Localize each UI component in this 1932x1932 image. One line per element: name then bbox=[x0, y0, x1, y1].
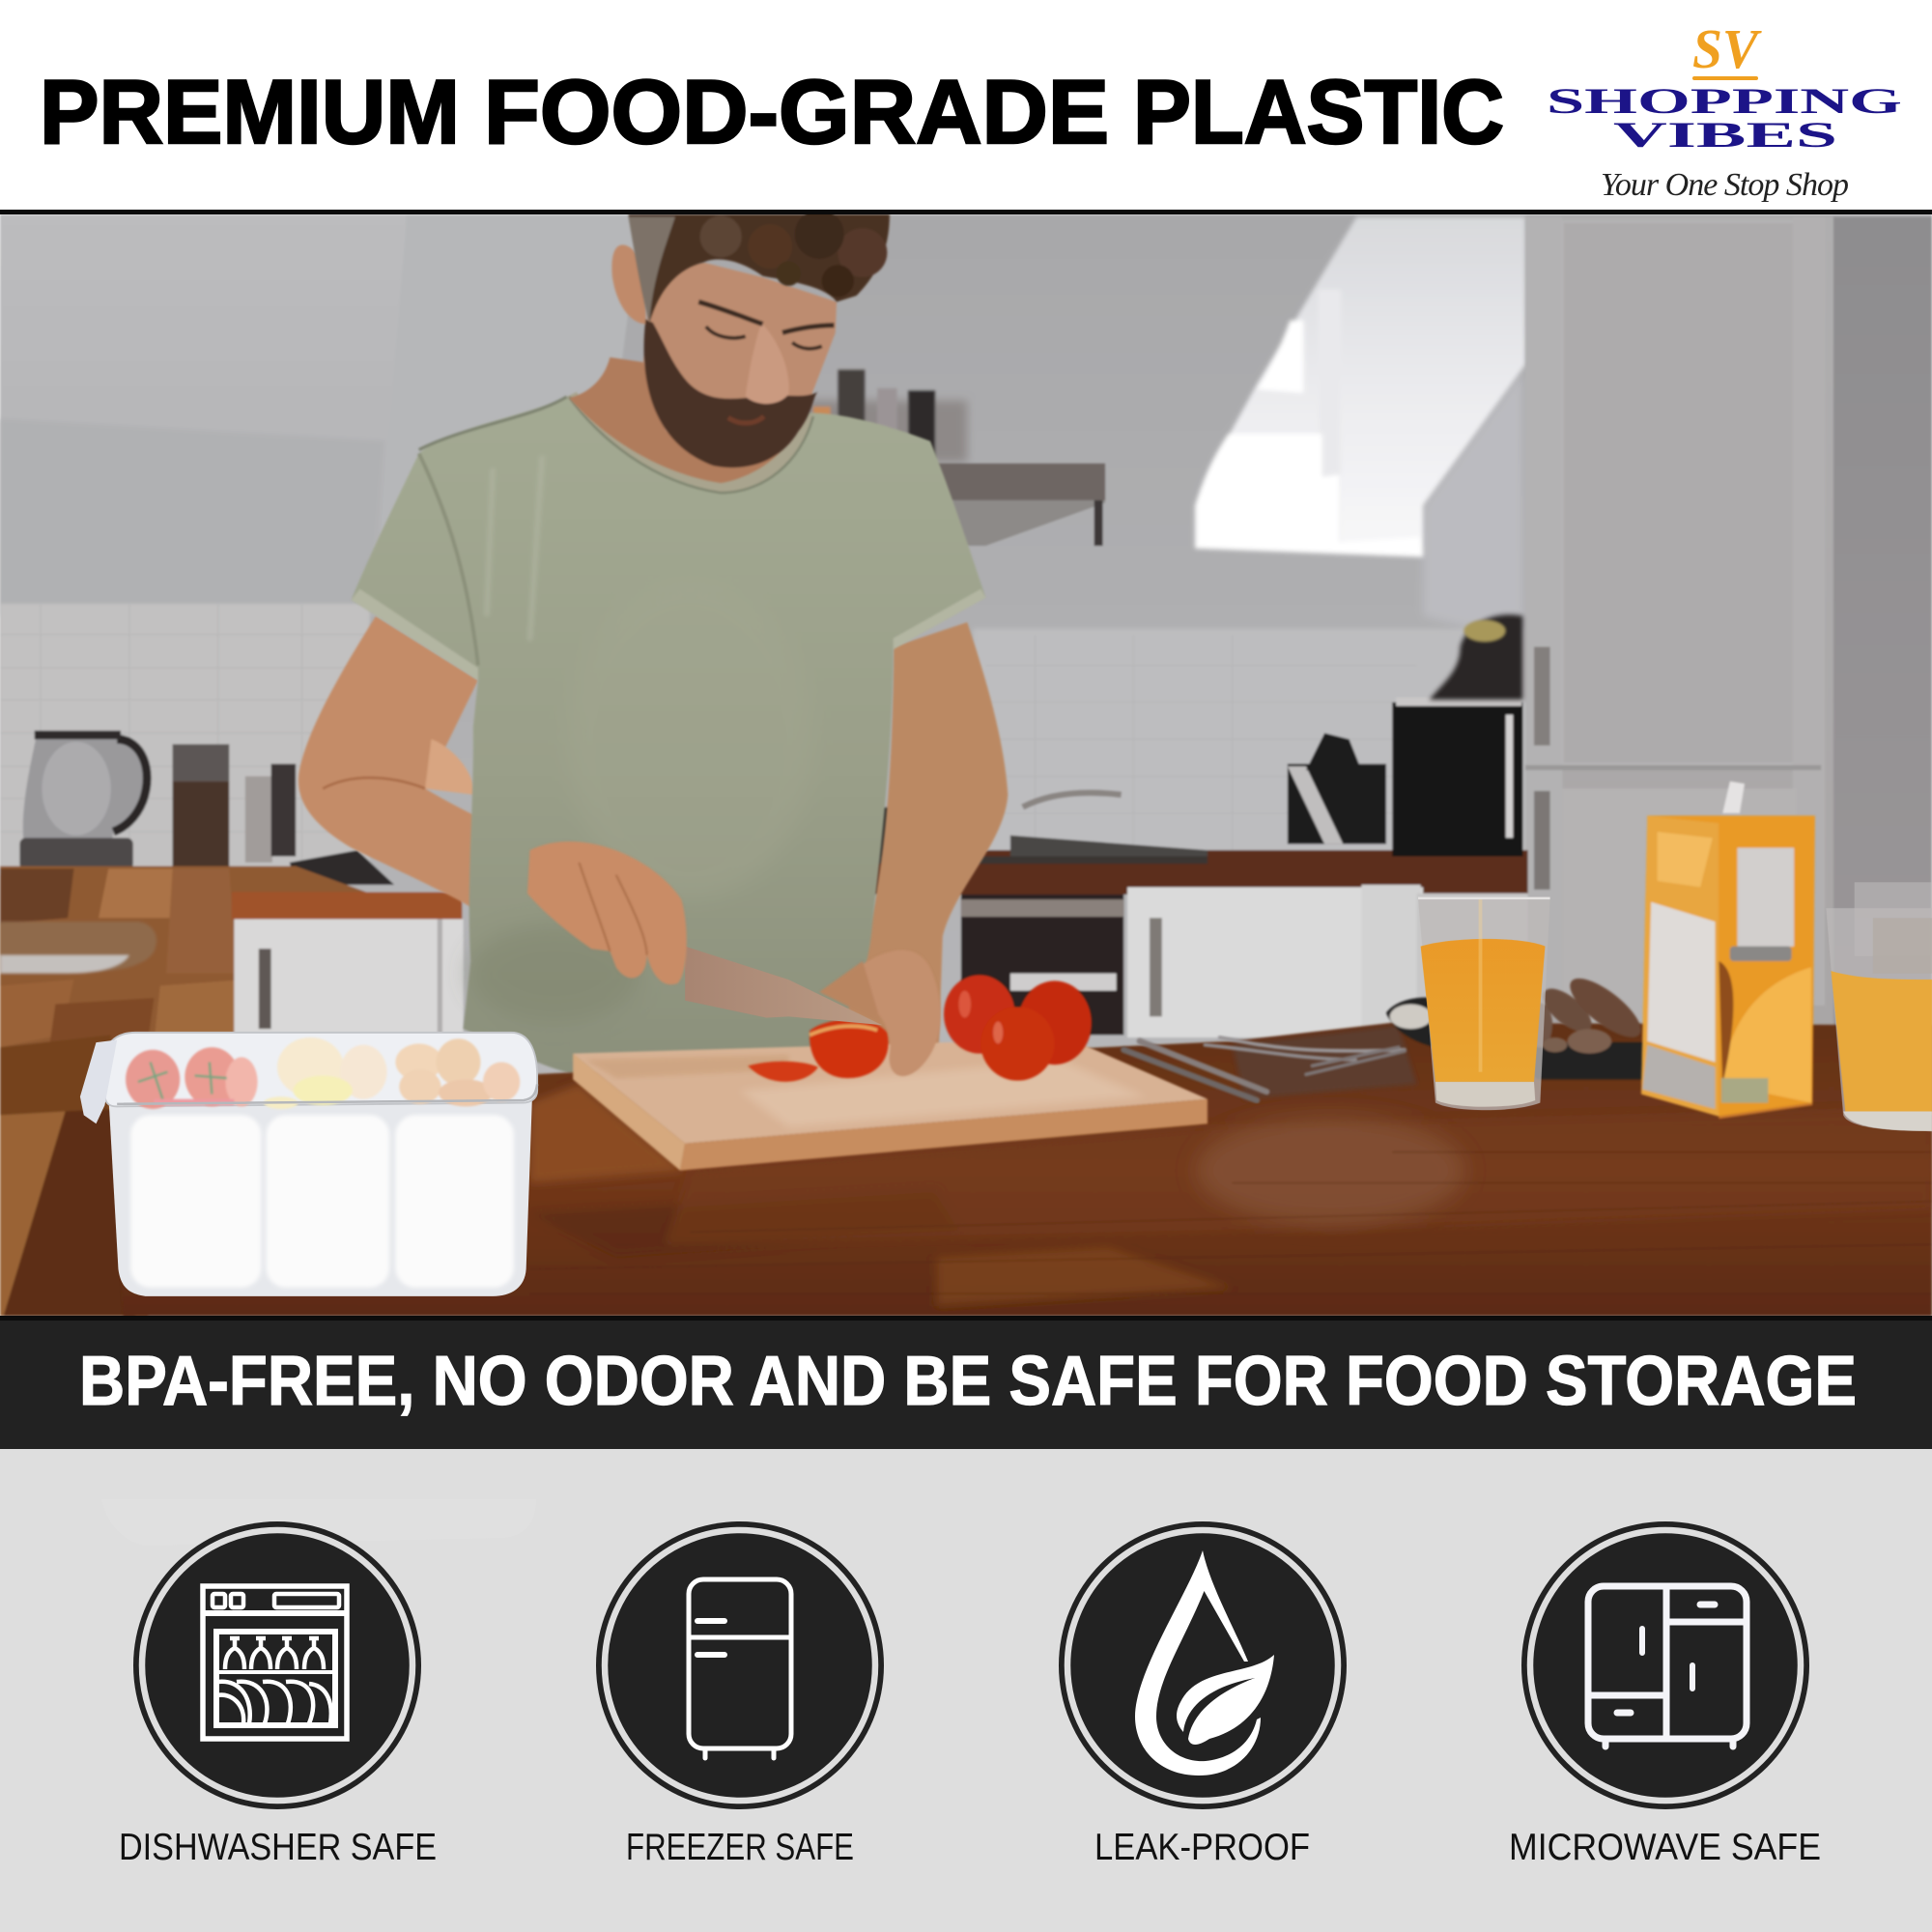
background: white header bbox=[0, 0, 1932, 211]
cutting board bbox=[573, 1038, 1208, 1171]
microwave and appliances bbox=[1288, 614, 1523, 856]
title: FOOD-GRADE bbox=[484, 61, 1109, 162]
label: LEAK-PROOF bbox=[1094, 1827, 1310, 1868]
sink bbox=[0, 922, 156, 972]
logo underline bbox=[1692, 76, 1758, 80]
product: storage box bbox=[80, 1033, 537, 1296]
icon: dishwasher bbox=[203, 1586, 347, 1739]
badge bbox=[1521, 1521, 1809, 1809]
tile lines bbox=[0, 604, 1417, 863]
feature: freezer safe bbox=[596, 1521, 884, 1868]
badge bbox=[133, 1521, 421, 1809]
main counter bbox=[113, 1023, 1932, 1316]
icon: water drop with leaf bbox=[1135, 1550, 1274, 1776]
box tab bbox=[80, 1040, 117, 1123]
coffee grinder and jars bbox=[173, 744, 394, 885]
man: head and neck bbox=[569, 244, 837, 483]
tomatoes bbox=[748, 975, 1092, 1082]
icon: refrigerator bbox=[689, 1579, 791, 1758]
man: beard bbox=[644, 319, 818, 468]
logo: Shopping Vibes bbox=[1547, 17, 1902, 203]
tall cabinet bbox=[1525, 216, 1932, 1030]
kettle bbox=[19, 730, 148, 870]
cutlery bbox=[1123, 1037, 1405, 1100]
feature: microwave safe bbox=[1509, 1521, 1821, 1868]
logo tagline: Your One Stop Shop bbox=[1601, 167, 1849, 203]
plate with sausages bbox=[1386, 969, 1649, 1079]
cooker hood bbox=[930, 464, 1105, 546]
badge bbox=[596, 1521, 884, 1809]
photo: kitchen scene bbox=[0, 210, 1932, 1316]
top divider line bbox=[0, 210, 1932, 214]
knife bbox=[685, 947, 882, 1025]
orange juice glass bbox=[1418, 898, 1550, 1110]
man: arms bbox=[298, 616, 1008, 1072]
right juice glasses bbox=[1826, 882, 1932, 1131]
box body bbox=[108, 1094, 532, 1296]
hob and pan bbox=[863, 793, 1208, 864]
feature: leak-proof bbox=[1059, 1521, 1347, 1868]
box lid rim bbox=[117, 1084, 537, 1104]
label: FREEZER SAFE bbox=[626, 1827, 854, 1868]
logo name: vibes: VIBES bbox=[1613, 116, 1837, 156]
juice carton bbox=[1641, 781, 1815, 1119]
box contents: potatoes bbox=[264, 1037, 387, 1109]
man: eyes bbox=[698, 301, 835, 349]
window bbox=[1195, 216, 1525, 557]
box inner canisters bbox=[130, 1115, 514, 1288]
box contents: onions bbox=[395, 1038, 520, 1106]
title bbox=[40, 61, 1504, 162]
icon: cabinet appliance bbox=[1588, 1586, 1747, 1747]
title: PLASTIC bbox=[1133, 61, 1504, 162]
banner band bbox=[0, 1316, 1932, 1449]
label: MICROWAVE SAFE bbox=[1509, 1827, 1821, 1868]
back counter right bbox=[863, 850, 1528, 1038]
man: hair bbox=[629, 210, 890, 323]
man: t-shirt bbox=[352, 392, 985, 1074]
box lid bbox=[104, 1033, 537, 1106]
logo name: shopping: SHOPPING bbox=[1547, 82, 1902, 122]
box contents: tomatoes bbox=[126, 1047, 258, 1109]
title: PREMIUM bbox=[40, 61, 460, 162]
wall background bbox=[0, 214, 1932, 1316]
label: DISHWASHER SAFE bbox=[119, 1827, 437, 1868]
shelf and bottles bbox=[807, 370, 967, 462]
badge bbox=[1059, 1521, 1347, 1809]
hands bbox=[527, 841, 941, 1076]
back counter left: wood planks bbox=[0, 867, 464, 1316]
bottom panel background bbox=[0, 1449, 1932, 1932]
logo mark: SV: SV bbox=[1692, 17, 1762, 80]
feature: dishwasher safe bbox=[119, 1521, 437, 1868]
